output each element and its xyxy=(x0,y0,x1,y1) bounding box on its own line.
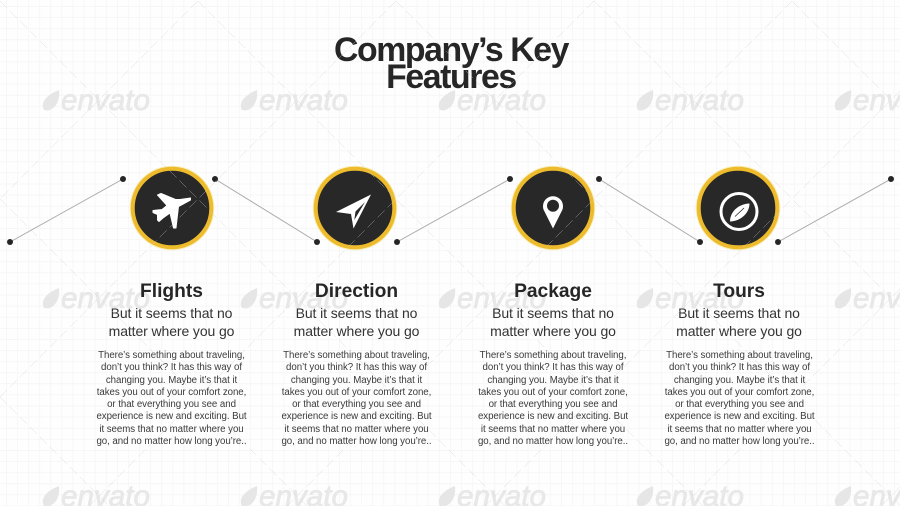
icon: map pin xyxy=(511,166,595,250)
body text: direction: experience is new and exciting. But xyxy=(281,411,432,422)
body text: flights: go, and no matter how long you’re.. xyxy=(96,436,247,447)
subheading: direction: matter where you go xyxy=(294,323,419,339)
body text: direction xyxy=(281,350,432,447)
body text: direction: or that everything you see and xyxy=(292,399,421,410)
body text: package: go, and no matter how long you’re.. xyxy=(478,436,628,447)
background grid and watermark: envato xyxy=(457,282,546,315)
connector: line 1 xyxy=(7,176,126,245)
body text: flights xyxy=(96,350,247,447)
body text: direction: takes you out of your comfort zone, xyxy=(282,387,431,398)
heading: package: Package xyxy=(514,281,592,302)
body text: tours: go, and no matter how long you’re.. xyxy=(664,436,815,447)
body text: flights: takes you out of your comfort zone, xyxy=(97,387,246,398)
subheading: tours: But it seems that no xyxy=(678,305,800,321)
heading: flights: Flights xyxy=(140,281,203,302)
body text: direction: changing you. Maybe it’s that it xyxy=(291,375,422,386)
connector: line 4 xyxy=(596,176,703,245)
subheading: flights: matter where you go xyxy=(109,323,234,339)
subheading: flights xyxy=(109,305,234,339)
panel: tours xyxy=(664,281,815,447)
panel: package xyxy=(478,281,628,447)
body text: package: it seems that no matter where you xyxy=(481,424,625,435)
body text: package: There’s something about traveling, xyxy=(480,350,626,361)
icon: airplane xyxy=(130,166,214,250)
body text: direction: There’s something about traveling, xyxy=(283,350,430,361)
body text: flights: experience is new and exciting. But xyxy=(96,411,247,422)
subheading: flights: But it seems that no xyxy=(111,305,232,321)
body text: tours: don’t you think? It has this way of xyxy=(669,362,810,373)
icon: compass xyxy=(696,166,780,250)
panel: direction xyxy=(281,281,432,447)
subheading: package: But it seems that no xyxy=(492,305,614,321)
background grid and watermark: envato xyxy=(457,84,546,117)
body text: flights: changing you. Maybe it’s that it xyxy=(106,375,237,386)
subheading: tours xyxy=(676,305,802,339)
body text: flights: don’t you think? It has this way of xyxy=(101,362,242,373)
connector: line 2 xyxy=(212,176,320,245)
body text: flights: or that everything you see and xyxy=(107,399,236,410)
title xyxy=(334,31,570,96)
body text: direction: it seems that no matter where you xyxy=(284,424,429,435)
subheading: package xyxy=(490,305,616,339)
subheading: direction xyxy=(294,305,419,339)
body text: flights: it seems that no matter where you xyxy=(99,424,244,435)
background grid and watermark: envato xyxy=(655,84,744,117)
subheading: tours: matter where you go xyxy=(676,323,802,339)
icon: navigation arrow xyxy=(313,166,397,250)
body text: flights: There’s something about traveling, xyxy=(98,350,245,361)
connector: line 3 xyxy=(394,176,513,245)
body text: package: changing you. Maybe it’s that it xyxy=(487,375,619,386)
heading: direction: Direction xyxy=(315,281,398,302)
body text: direction: don’t you think? It has this way of xyxy=(286,362,427,373)
body text: package: or that everything you see and xyxy=(489,399,617,410)
body text: tours: experience is new and exciting. But xyxy=(664,411,815,422)
body text: package: experience is new and exciting. But xyxy=(478,411,628,422)
heading: tours: Tours xyxy=(713,281,765,302)
connector: line 5 xyxy=(775,176,894,245)
body text: tours: changing you. Maybe it’s that it xyxy=(674,375,805,386)
background grid and watermark: envato xyxy=(655,282,744,315)
subheading: package: matter where you go xyxy=(490,323,616,339)
body text: tours: There’s something about traveling, xyxy=(666,350,813,361)
body text: package: takes you out of your comfort zone, xyxy=(478,387,628,398)
body text: direction: go, and no matter how long you’re.. xyxy=(281,436,432,447)
title: Company’s Key xyxy=(334,31,568,69)
background grid and watermark: envato xyxy=(61,84,150,117)
title: Features xyxy=(386,58,516,96)
body text: tours: takes you out of your comfort zone, xyxy=(665,387,814,398)
background grid and watermark: envato xyxy=(61,282,150,315)
body text: tours: or that everything you see and xyxy=(675,399,804,410)
background grid and watermark: envato xyxy=(259,282,348,315)
panel: flights xyxy=(96,281,247,447)
body text: tours: it seems that no matter where you xyxy=(667,424,812,435)
subheading: direction: But it seems that no xyxy=(296,305,417,321)
background grid and watermark: envato xyxy=(259,84,348,117)
body text: package xyxy=(478,350,628,447)
body text: package: don’t you think? It has this way of xyxy=(483,362,623,373)
body text: tours xyxy=(664,350,815,447)
